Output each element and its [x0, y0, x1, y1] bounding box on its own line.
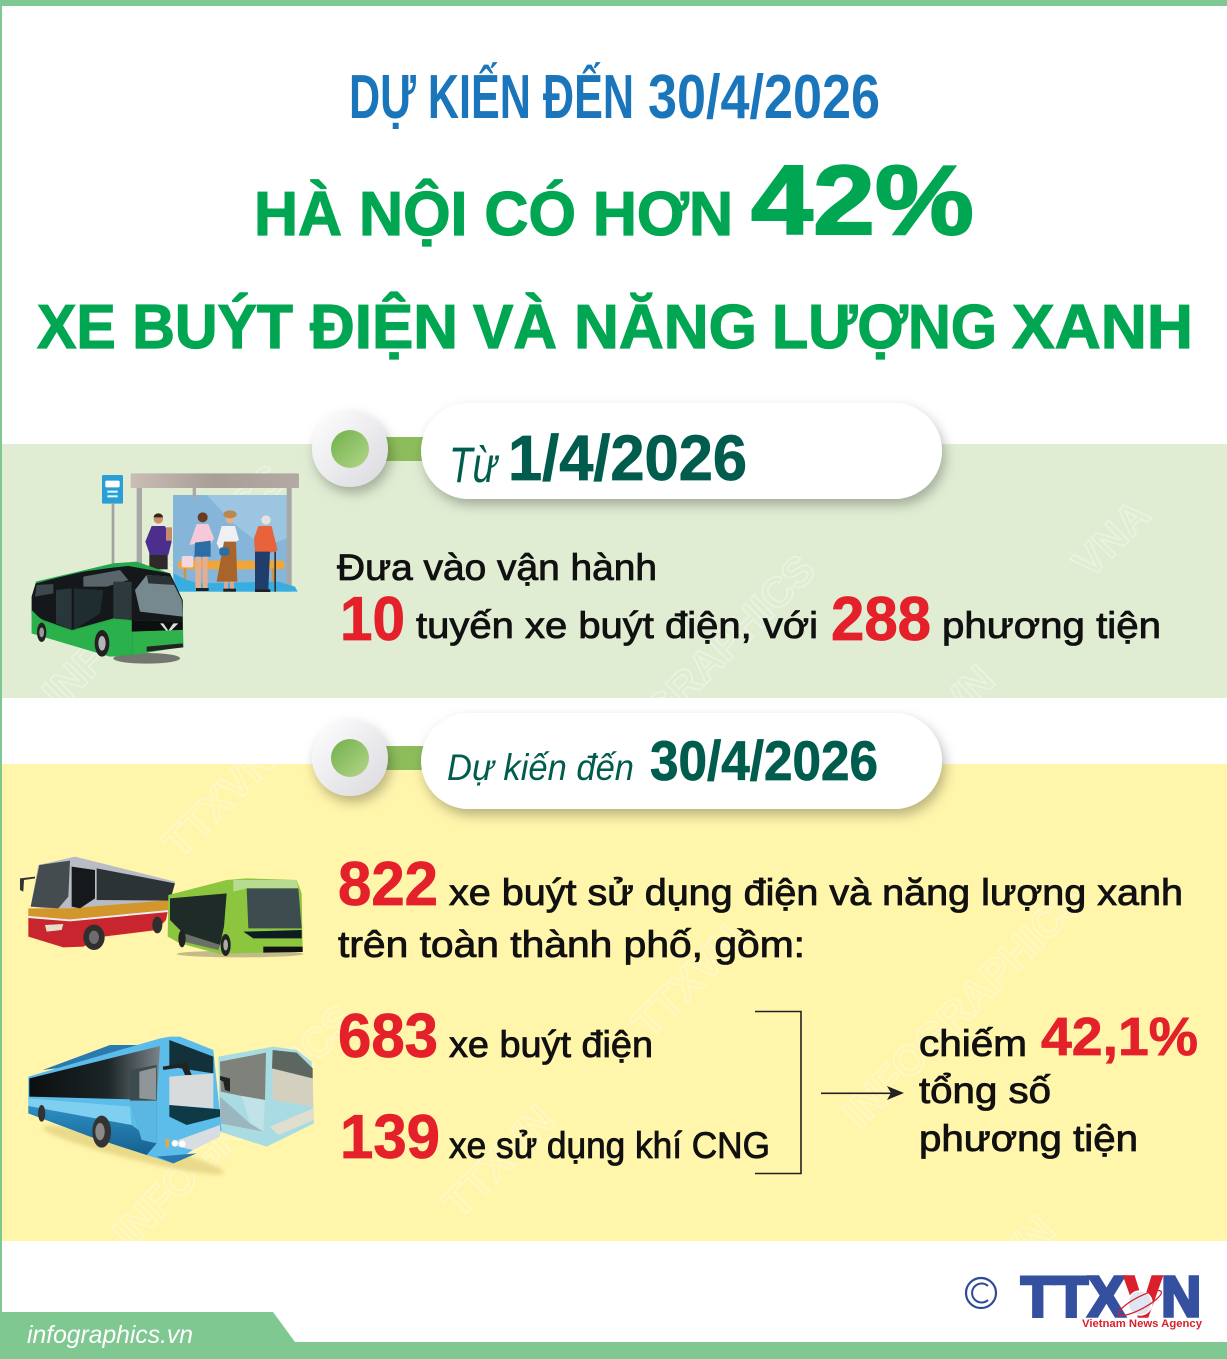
watermarks: INFOGRAPHICS: [563, 545, 824, 806]
text: 139 CNG buses: xe sử dụng khí CNG: [449, 1125, 770, 1166]
callout: 42.1% of total vehicles: phương tiện: [919, 1118, 1138, 1159]
watermarks: [33, 455, 1159, 1336]
text: 10 routes, 288 vehicles: 288: [831, 585, 931, 654]
copyright symbol: [966, 1278, 996, 1308]
text: 683 electric buses: 683: [338, 1002, 438, 1071]
footer bar with infographics.vn tab: [0, 1312, 1227, 1359]
panel: from 1/4/2026 background: [2, 444, 1227, 698]
watermarks: TTXVN: [873, 656, 1004, 786]
text: 10 routes, 288 vehicles: 10: [340, 585, 405, 654]
person: elder with cane: [254, 515, 278, 592]
callout: 42.1% of total vehicles: 42,1%: [1041, 1007, 1198, 1067]
title line 3: LƯỢNG: [772, 293, 997, 362]
text: 822 buses: xe buýt sử dụng điện và năng lượng xanh: [449, 872, 1183, 913]
title: [37, 63, 1193, 362]
text: 822 buses: 822: [338, 850, 438, 919]
bracket: [755, 1012, 801, 1174]
date pill 2: 30/4/2026: [650, 729, 878, 792]
illustration: red-yellow bus and green bus: [20, 857, 303, 957]
text: 10 routes, 288 vehicles: tuyến xe buýt điện, với: [416, 605, 818, 646]
title line 2: [254, 145, 974, 255]
person: man in purple: [145, 513, 172, 569]
watermarks: TTXVN: [623, 916, 754, 1046]
logo: TTXVN Vietnam News Agency: Vietnam News Agency: [1082, 1318, 1203, 1330]
watermarks: INFOGRAPHICS: [103, 995, 364, 1256]
watermarks: INFOGRAPHICS: [33, 455, 294, 716]
title line 3: [37, 293, 1193, 362]
title line 3: XANH: [1012, 293, 1193, 362]
light blue bus: [218, 1047, 314, 1147]
blue bus: [28, 1037, 230, 1182]
title line 2: HÀ NỘI CÓ HƠN: [254, 180, 733, 249]
person: woman in pink: [182, 512, 214, 591]
watermarks: TTXVN: [433, 1096, 564, 1226]
watermarks: VNA: [1063, 490, 1159, 586]
watermarks: TTXVN: [153, 736, 284, 866]
text: 683 electric buses: xe buýt điện: [449, 1024, 653, 1065]
red and yellow diesel bus: [20, 857, 175, 950]
title line 1: 30/4/2026: [648, 63, 880, 132]
timeline marker 1: [312, 411, 430, 487]
title line 3: ĐIỆN: [310, 293, 458, 362]
source label: infographics.vn: [27, 1321, 193, 1349]
title line 3: VÀ: [473, 293, 557, 362]
text: 10 routes, 288 vehicles: [340, 585, 1161, 654]
watermarks: INFOGRAPHICS: [833, 875, 1094, 1136]
text: 822 buses: trên toàn thành phố, gồm:: [338, 924, 805, 965]
title line 2: 42%: [751, 145, 974, 255]
timeline marker 2: [312, 720, 430, 796]
title line 1: DỰ KIẾN ĐẾN: [349, 63, 634, 132]
green electric bus: [168, 878, 303, 957]
date pill 1: Từ: [449, 437, 500, 493]
callout: 42.1% of total vehicles: chiếm: [919, 1023, 1027, 1064]
watermarks: TTXVN: [933, 1206, 1064, 1336]
illustration: blue buses: [28, 1037, 314, 1182]
illustration: bus stop with passengers: [102, 473, 299, 592]
text: 139 CNG buses: 139: [340, 1103, 440, 1172]
panel: by 30/4/2026 background: [2, 764, 1227, 1241]
arrow: [821, 1086, 904, 1100]
date pill 1: 1/4/2026: [508, 422, 747, 494]
text: 683 electric buses: [338, 1002, 653, 1071]
callout: 42.1% of total vehicles: [919, 1007, 1198, 1159]
date pill 2: [421, 713, 942, 809]
logo: TTXVN Vietnam News Agency: TTXVN: [1021, 1265, 1201, 1329]
text: 139 CNG buses: [340, 1103, 770, 1172]
title line 3: XE BUÝT: [37, 293, 293, 362]
title line 3: NĂNG: [574, 293, 757, 362]
illustration: green electric bus: [32, 562, 183, 664]
text: Đưa vào vận hành: Đưa vào vận hành: [337, 547, 657, 588]
callout: 42.1% of total vehicles: tổng số: [919, 1070, 1051, 1111]
text: 10 routes, 288 vehicles: phương tiện: [942, 605, 1161, 646]
date pill 1: [421, 403, 942, 499]
person: woman in hat: [217, 510, 239, 592]
text: 822 buses: [338, 850, 1183, 965]
date pill 2: Dự kiến đến: [447, 747, 634, 788]
